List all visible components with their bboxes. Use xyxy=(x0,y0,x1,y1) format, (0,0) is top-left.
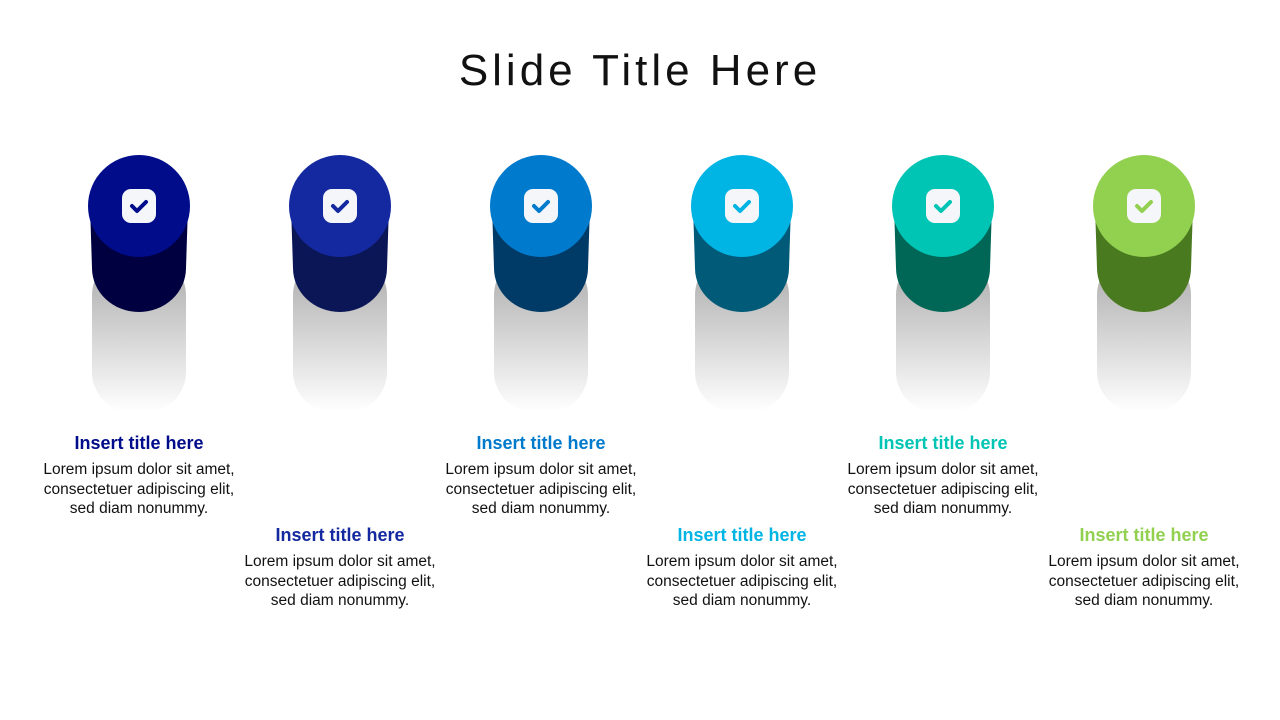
text block 4: sed diam nonummy. xyxy=(673,592,811,609)
text block 2: consectetuer adipiscing elit, xyxy=(245,572,435,590)
text block 3: Lorem ipsum dolor sit amet, xyxy=(445,461,637,478)
text block 4: Lorem ipsum dolor sit amet, xyxy=(646,553,838,570)
cylinder 2 xyxy=(289,155,391,412)
text block 4 xyxy=(646,525,838,609)
text block 5: consectetuer adipiscing elit, xyxy=(848,480,1038,498)
text block 2: sed diam nonummy. xyxy=(271,592,409,609)
text block 3 xyxy=(445,433,637,517)
text block 3: sed diam nonummy. xyxy=(472,500,610,517)
text block 6 xyxy=(1048,525,1240,609)
cylinder 6 xyxy=(1093,155,1195,412)
text block 1 xyxy=(43,433,235,517)
text block 6: Insert title here xyxy=(1079,525,1209,545)
cylinder 3 xyxy=(490,155,592,412)
text block 4: Insert title here xyxy=(677,525,807,545)
text block 1: Lorem ipsum dolor sit amet, xyxy=(43,461,235,478)
text block 4: consectetuer adipiscing elit, xyxy=(647,572,837,590)
cylinder 5 xyxy=(892,155,994,412)
text block 3: consectetuer adipiscing elit, xyxy=(446,480,636,498)
text block 5: Lorem ipsum dolor sit amet, xyxy=(847,461,1039,478)
cylinder 4 xyxy=(691,155,793,412)
title: Slide Title Here xyxy=(459,46,821,95)
text block 1: sed diam nonummy. xyxy=(70,500,208,517)
cylinder 1 xyxy=(88,155,190,412)
text block 6: consectetuer adipiscing elit, xyxy=(1049,572,1239,590)
text block 6: sed diam nonummy. xyxy=(1075,592,1213,609)
text block 2: Lorem ipsum dolor sit amet, xyxy=(244,553,436,570)
text block 2 xyxy=(244,525,436,609)
text block 1: consectetuer adipiscing elit, xyxy=(44,480,234,498)
text block 6: Lorem ipsum dolor sit amet, xyxy=(1048,553,1240,570)
text block 5 xyxy=(847,433,1039,517)
text block 2: Insert title here xyxy=(275,525,405,545)
text block 5: Insert title here xyxy=(878,433,1008,453)
text block 1: Insert title here xyxy=(74,433,204,453)
text block 5: sed diam nonummy. xyxy=(874,500,1012,517)
text block 3: Insert title here xyxy=(476,433,606,453)
